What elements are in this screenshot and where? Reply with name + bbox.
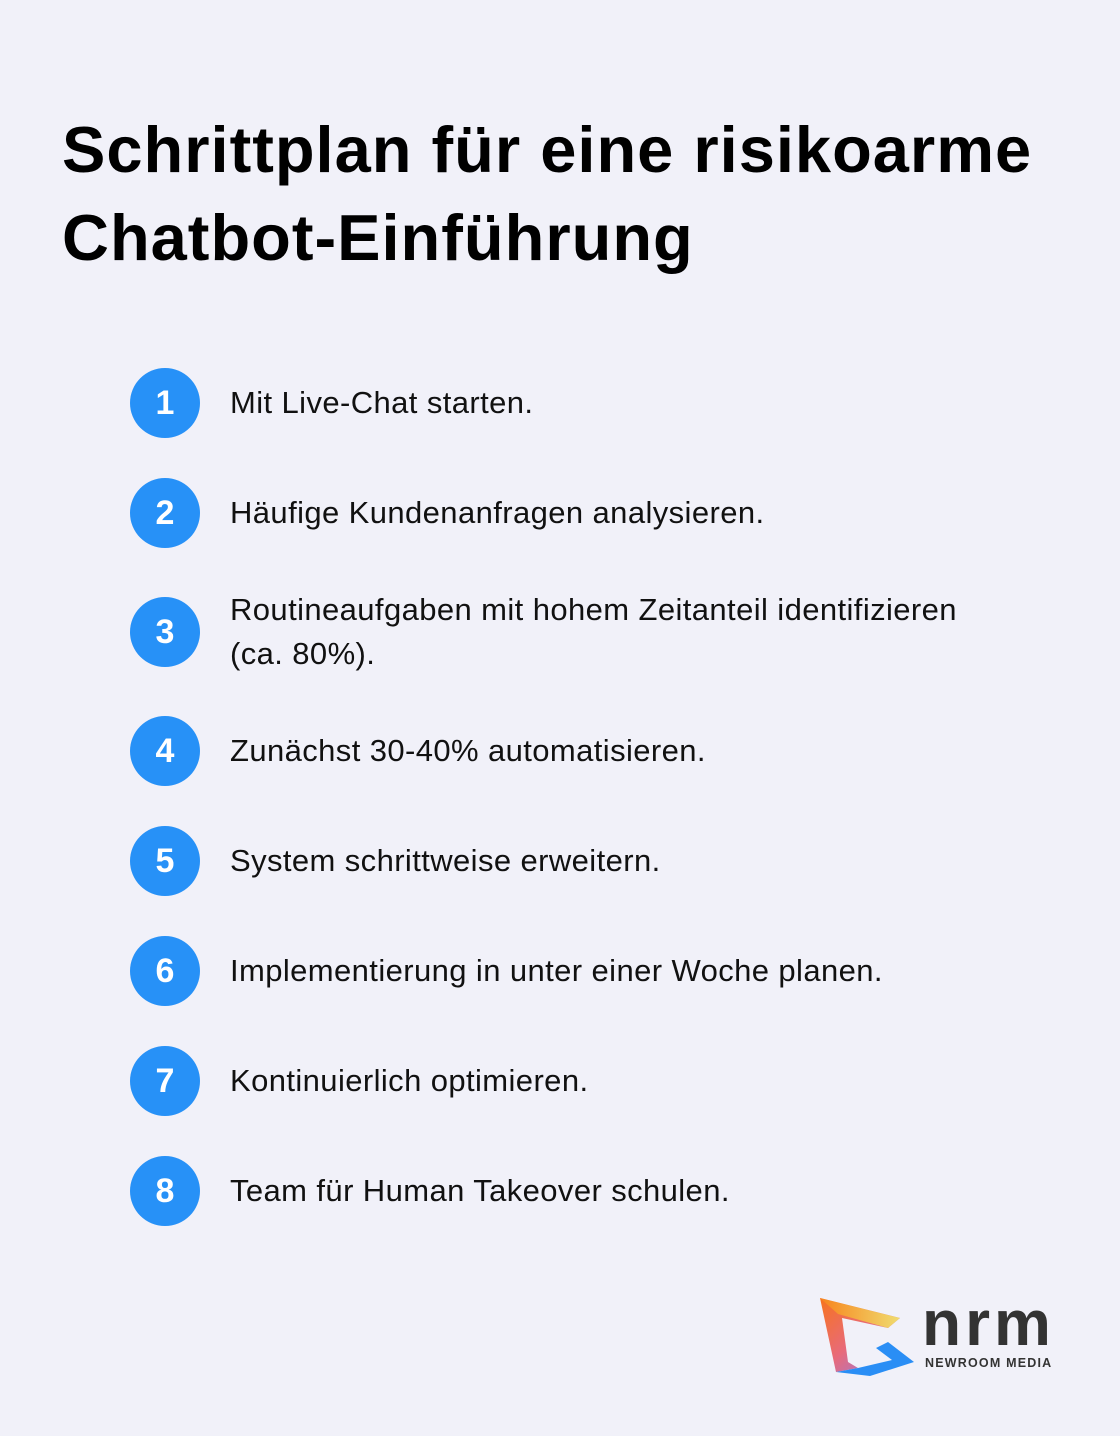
title: Schrittplan für eine risikoarme Chatbot-Einführung xyxy=(62,113,1032,274)
logo: nrm xyxy=(922,1287,1055,1359)
step 3: (ca. 80%). xyxy=(230,636,375,671)
step 6: 6 xyxy=(156,952,174,990)
step 1: 1 xyxy=(156,384,174,422)
step 5: System schrittweise erweitern. xyxy=(230,843,661,878)
step 5 xyxy=(130,826,661,896)
step 4: 4 xyxy=(156,732,174,770)
logo xyxy=(820,1287,1055,1376)
step 7: Kontinuierlich optimieren. xyxy=(230,1063,588,1098)
step 1: Mit Live-Chat starten. xyxy=(230,385,533,420)
step 6: Implementierung in unter einer Woche planen. xyxy=(230,953,883,988)
step 3: 3 xyxy=(156,613,174,651)
step 3 xyxy=(130,592,957,671)
step 8: Team für Human Takeover schulen. xyxy=(230,1173,730,1208)
step 7 xyxy=(130,1046,588,1116)
step 8 xyxy=(130,1156,730,1226)
step 2: 2 xyxy=(156,494,174,532)
step 4: Zunächst 30-40% automatisieren. xyxy=(230,733,706,768)
step 2 xyxy=(130,478,764,548)
step 7: 7 xyxy=(156,1062,174,1100)
logo: NEWROOM MEDIA xyxy=(925,1356,1052,1370)
step 2: Häufige Kundenanfragen analysieren. xyxy=(230,495,764,530)
step 4 xyxy=(130,716,706,786)
step 6 xyxy=(130,936,883,1006)
step 5: 5 xyxy=(156,842,174,880)
step 8: 8 xyxy=(156,1172,174,1210)
step 1 xyxy=(130,368,533,438)
step 3: Routineaufgaben mit hohem Zeitanteil identifizieren xyxy=(230,592,957,627)
